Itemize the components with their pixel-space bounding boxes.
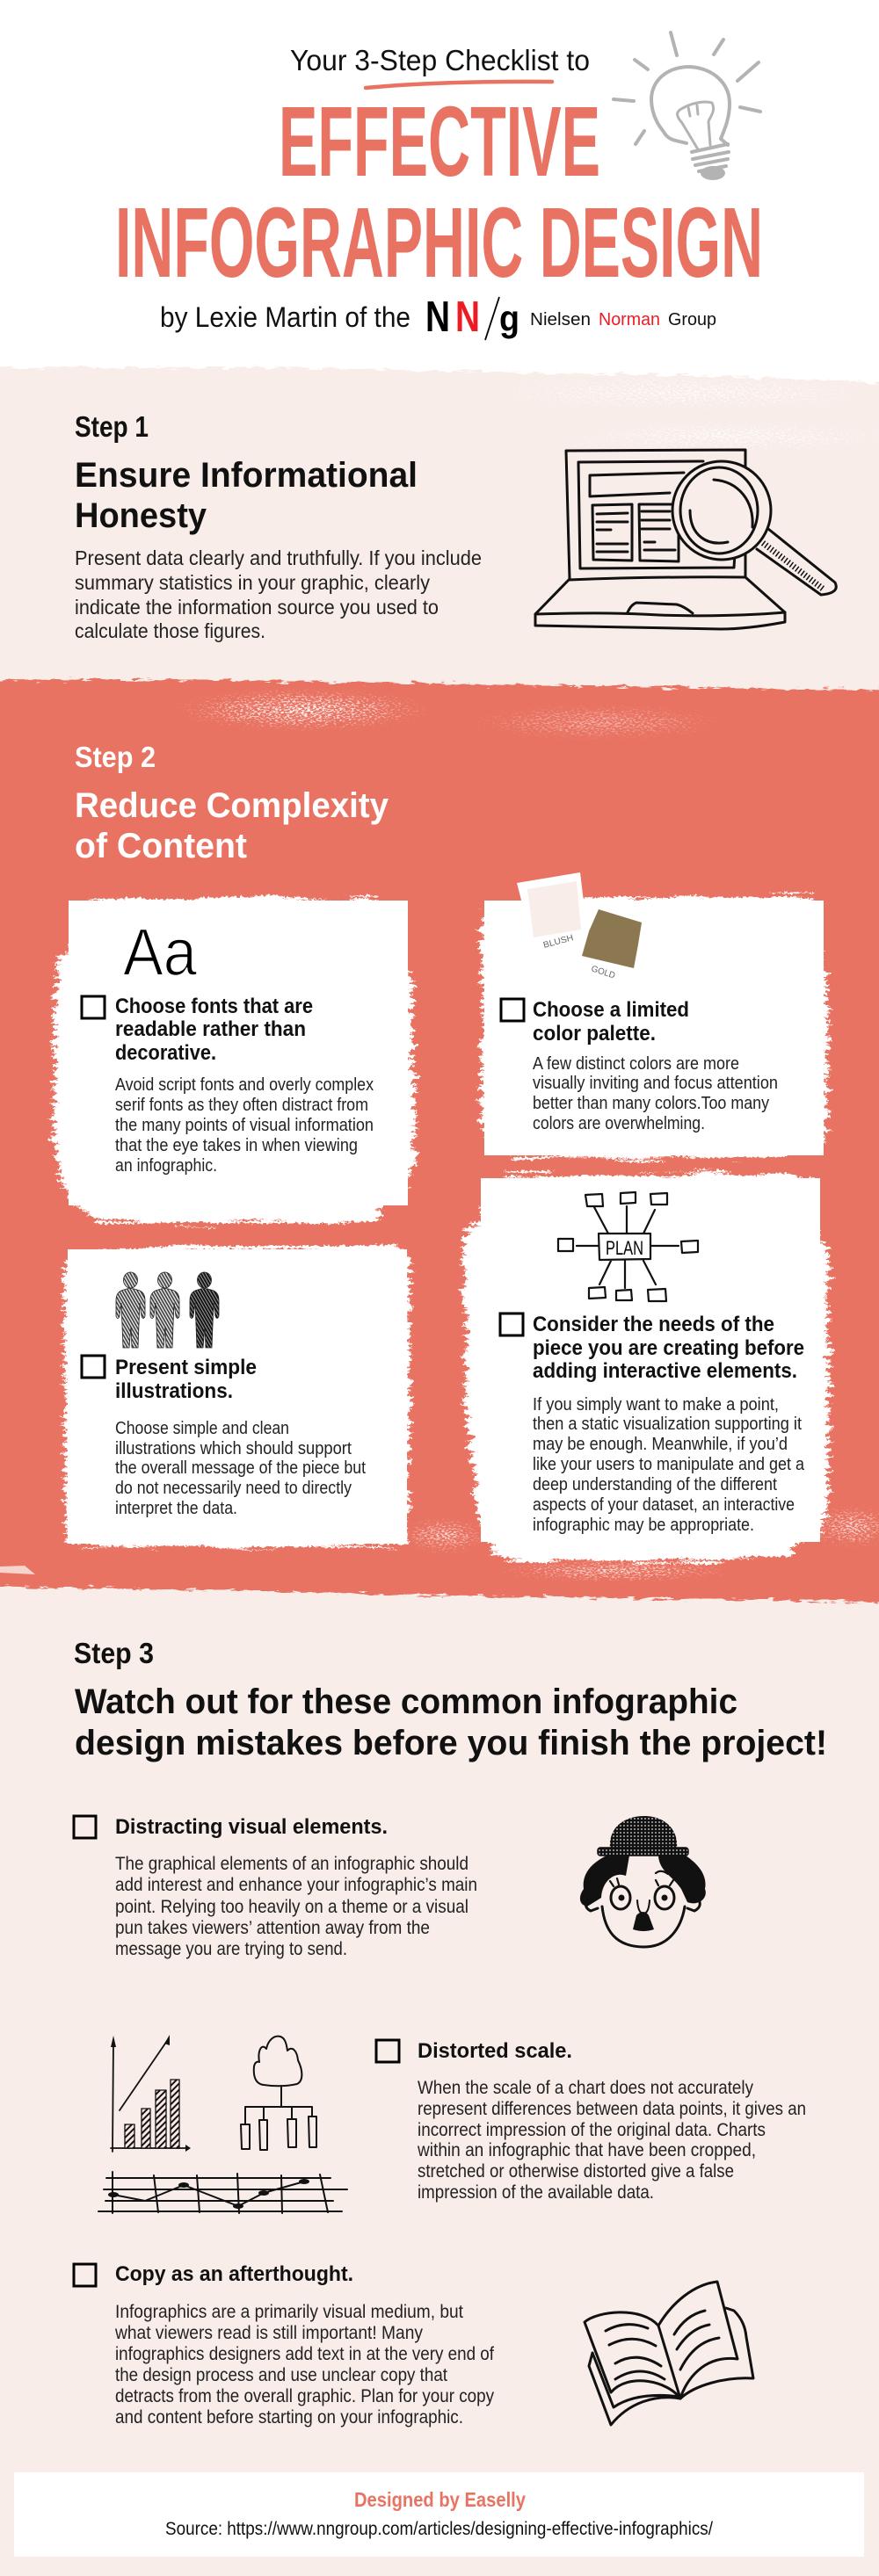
step 2 label: Step 2 <box>75 741 156 773</box>
card body: the many points of visual information <box>115 1116 374 1135</box>
card body: visually inviting and focus attention <box>533 1074 778 1093</box>
card heading: Consider the needs of the <box>533 1313 774 1336</box>
step 3 label: Step 3 <box>74 1637 154 1669</box>
card body: an infographic. <box>115 1156 217 1176</box>
card heading <box>115 995 313 1065</box>
line chart sketch <box>98 2172 347 2213</box>
item heading: Distorted scale. <box>418 2039 572 2063</box>
checkbox <box>500 1313 523 1335</box>
card body: colors are overwhelming. <box>533 1114 705 1133</box>
item body: stretched or otherwise distorted give a false <box>418 2160 734 2182</box>
card body: infographic may be appropriate. <box>533 1516 754 1535</box>
item body: detracts from the overall graphic. Plan for your copy <box>115 2385 494 2406</box>
card heading <box>115 1356 257 1403</box>
background: step 2 coral band <box>0 679 879 1603</box>
underline stroke <box>366 82 552 88</box>
icon: PLAN diagram <box>558 1192 698 1301</box>
card body: then a static visualization supporting it <box>533 1415 802 1434</box>
card body: illustrations which should support <box>115 1439 352 1458</box>
item: copy as an afterthought <box>74 2262 753 2428</box>
icon: laptop with magnifier <box>535 450 836 629</box>
icon: distorted charts <box>98 2035 347 2213</box>
step 3 heading <box>75 1682 827 1762</box>
card body: deep understanding of the different <box>533 1475 777 1494</box>
checkbox <box>82 996 105 1018</box>
step 1 heading: Honesty <box>75 496 207 535</box>
step 1 label: Step 1 <box>75 410 149 443</box>
card body: may be enough. Meanwhile, if you’d <box>533 1435 788 1454</box>
bar chart sketch <box>111 2035 191 2152</box>
footer <box>14 2472 864 2557</box>
card: fonts <box>54 897 415 1223</box>
step 1 body: indicate the information source you used to <box>75 596 439 619</box>
card heading <box>533 1313 804 1383</box>
icon: PLAN diagram: PLAN <box>606 1237 643 1259</box>
step 2 heading: of Content <box>75 827 247 865</box>
card: colour palette <box>481 872 827 1158</box>
item body: Infographics are a primarily visual medium, but <box>115 2301 463 2322</box>
texture: brush speckles <box>0 372 879 1583</box>
logo: NN/g: N <box>425 293 450 341</box>
panel: step 1 <box>75 410 836 642</box>
item body: infographics designers add text in at the very end of <box>115 2343 494 2364</box>
step 1 body <box>75 546 482 642</box>
step 3 heading: design mistakes before you finish the project! <box>75 1724 827 1762</box>
background: step 1 band <box>0 367 879 712</box>
torn card edge <box>481 897 827 1158</box>
logo: NN/g <box>425 293 716 341</box>
item heading: Copy as an afterthought. <box>115 2262 353 2286</box>
step 1 body: calculate those figures. <box>75 619 265 642</box>
card body <box>115 1419 366 1518</box>
card heading: Present simple <box>115 1356 257 1379</box>
icon: paint swatches: BLUSH <box>542 933 575 951</box>
step 1 heading <box>75 456 418 535</box>
item body: point. Relying too heavily on a theme or a visual <box>115 1896 469 1917</box>
item body: message you are trying to send. <box>115 1938 347 1959</box>
card body: If you simply want to make a point, <box>533 1395 779 1415</box>
card heading: decorative. <box>115 1041 216 1065</box>
icon: light bulb <box>614 33 760 180</box>
logo: NN/g: Norman <box>599 310 660 329</box>
card body: Choose simple and clean <box>115 1419 289 1438</box>
icon: face with bowler hat <box>580 1816 706 1947</box>
logo: NN/g: Nielsen <box>530 310 591 329</box>
item body: The graphical elements of an infographic should <box>115 1853 469 1874</box>
icon: Aa: Aa <box>123 915 198 990</box>
item body: add interest and enhance your infographic’s main <box>115 1874 477 1895</box>
item body <box>115 1853 477 1959</box>
icon: paint swatches <box>517 872 642 981</box>
torn card edge <box>464 1174 829 1560</box>
card body: A few distinct colors are more <box>533 1054 739 1074</box>
item body: incorrect impression of the original data. Charts <box>418 2119 766 2140</box>
torn card edge <box>64 1247 410 1548</box>
item: distorted scale <box>98 2035 806 2213</box>
step 1 body: summary statistics in your graphic, clearly <box>75 571 430 594</box>
credit: Designed by Easelly <box>354 2488 526 2511</box>
card heading: piece you are creating before <box>533 1336 804 1360</box>
item body <box>417 2077 806 2203</box>
panel: step 2 <box>54 741 829 1560</box>
card body: Avoid script fonts and overly complex <box>115 1075 374 1095</box>
card heading: color palette. <box>533 1022 656 1046</box>
item body: When the scale of a chart does not accurately <box>418 2077 753 2098</box>
checkbox <box>376 2040 399 2062</box>
card: simple illustrations <box>64 1247 410 1548</box>
card body: that the eye takes in when viewing <box>115 1136 358 1155</box>
card heading: illustrations. <box>115 1379 233 1403</box>
cloud tree sketch <box>241 2037 316 2150</box>
logo: NN/g: g <box>499 298 519 339</box>
card heading: adding interactive elements. <box>533 1359 797 1383</box>
item: distracting visual elements <box>74 1815 706 1959</box>
step 1 heading: Ensure Informational <box>75 456 418 495</box>
card body: better than many colors.Too many <box>533 1094 769 1113</box>
card body: serif fonts as they often distract from <box>115 1096 368 1115</box>
card body <box>533 1395 805 1535</box>
checkbox <box>82 1356 105 1378</box>
step 2 heading: Reduce Complexity <box>75 786 389 825</box>
icon: open book <box>585 2282 753 2425</box>
torn card edge <box>54 897 415 1223</box>
title <box>115 86 763 298</box>
byline: by Lexie Martin of the <box>160 301 410 333</box>
checkbox <box>74 2264 96 2286</box>
item heading: Distracting visual elements. <box>115 1815 388 1839</box>
item body: and content before starting on your infographic. <box>115 2406 463 2428</box>
card body: the overall message of the piece but <box>115 1458 366 1478</box>
title: EFFECTIVE <box>279 86 600 197</box>
step 1 body: Present data clearly and truthfully. If you include <box>75 546 482 569</box>
logo: NN/g: N <box>455 293 480 341</box>
checkbox <box>74 1816 96 1838</box>
icon: paint swatches: GOLD <box>590 964 616 981</box>
background: step 3 page <box>0 1573 879 2576</box>
card heading: Choose fonts that are <box>115 995 313 1018</box>
step 3 heading: Watch out for these common infographic <box>75 1682 737 1721</box>
item body: what viewers read is still important! Many <box>114 2322 423 2343</box>
card body <box>533 1054 778 1133</box>
card heading: Choose a limited <box>533 998 689 1022</box>
step 2 heading <box>75 786 389 865</box>
item body: within an infographic that have been cropped, <box>417 2139 756 2160</box>
item body: pun takes viewers’ attention away from the <box>115 1917 430 1938</box>
source: Source: https://www.nngroup.com/articles/designing-effective-infographics/ <box>165 2519 713 2539</box>
heading: subtitle: Your 3-Step Checklist to <box>290 44 590 76</box>
item body: the design process and use unclear copy that <box>115 2364 447 2385</box>
background: brush band behind step 3 items <box>0 1971 879 2277</box>
panel: step 3 <box>74 1637 827 2428</box>
item body: represent differences between data points, it gives an <box>418 2098 806 2119</box>
card: interactive elements <box>464 1174 829 1560</box>
icon: three people <box>116 1272 219 1348</box>
card body <box>115 1075 374 1176</box>
card body: do not necessarily need to directly <box>115 1479 352 1498</box>
checkbox <box>501 999 524 1021</box>
card body: like your users to manipulate and get a <box>533 1455 805 1474</box>
card body: aspects of your dataset, an interactive <box>533 1495 795 1515</box>
card body: interpret the data. <box>115 1499 237 1518</box>
card heading <box>533 998 689 1046</box>
card heading: readable rather than <box>115 1017 306 1041</box>
logo: NN/g: Group <box>668 310 716 329</box>
item body: impression of the available data. <box>418 2182 654 2203</box>
item body <box>114 2301 494 2428</box>
